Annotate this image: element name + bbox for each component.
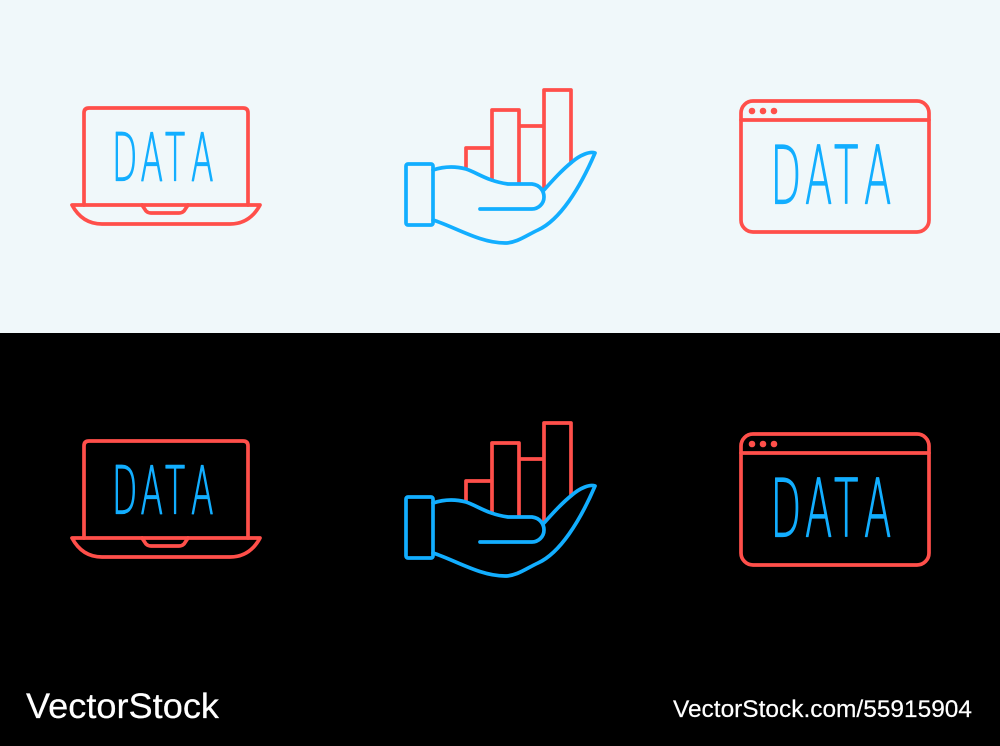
icon: browser window with data (dark): DATA	[770, 462, 891, 555]
text: image reference URL: VectorStock.com/55915904	[673, 696, 972, 723]
icon: laptop with data (dark)	[72, 441, 260, 557]
icon: laptop with data (light)	[72, 108, 260, 224]
icon: browser window with data (light)	[741, 101, 929, 232]
panel: black background	[0, 333, 1000, 746]
logo: VectorStock wordmark: VectorStock	[26, 687, 220, 726]
icon: hand holding bar chart (dark)	[406, 423, 595, 576]
icon: browser window with data (dark)	[741, 434, 929, 565]
icon: laptop with data (dark): DATA	[112, 454, 214, 530]
panel: light background	[0, 0, 1000, 333]
icon: laptop with data (light): DATA	[112, 121, 214, 197]
icon: hand holding bar chart (light)	[406, 90, 595, 243]
icon: browser window with data (light): DATA	[770, 129, 891, 222]
